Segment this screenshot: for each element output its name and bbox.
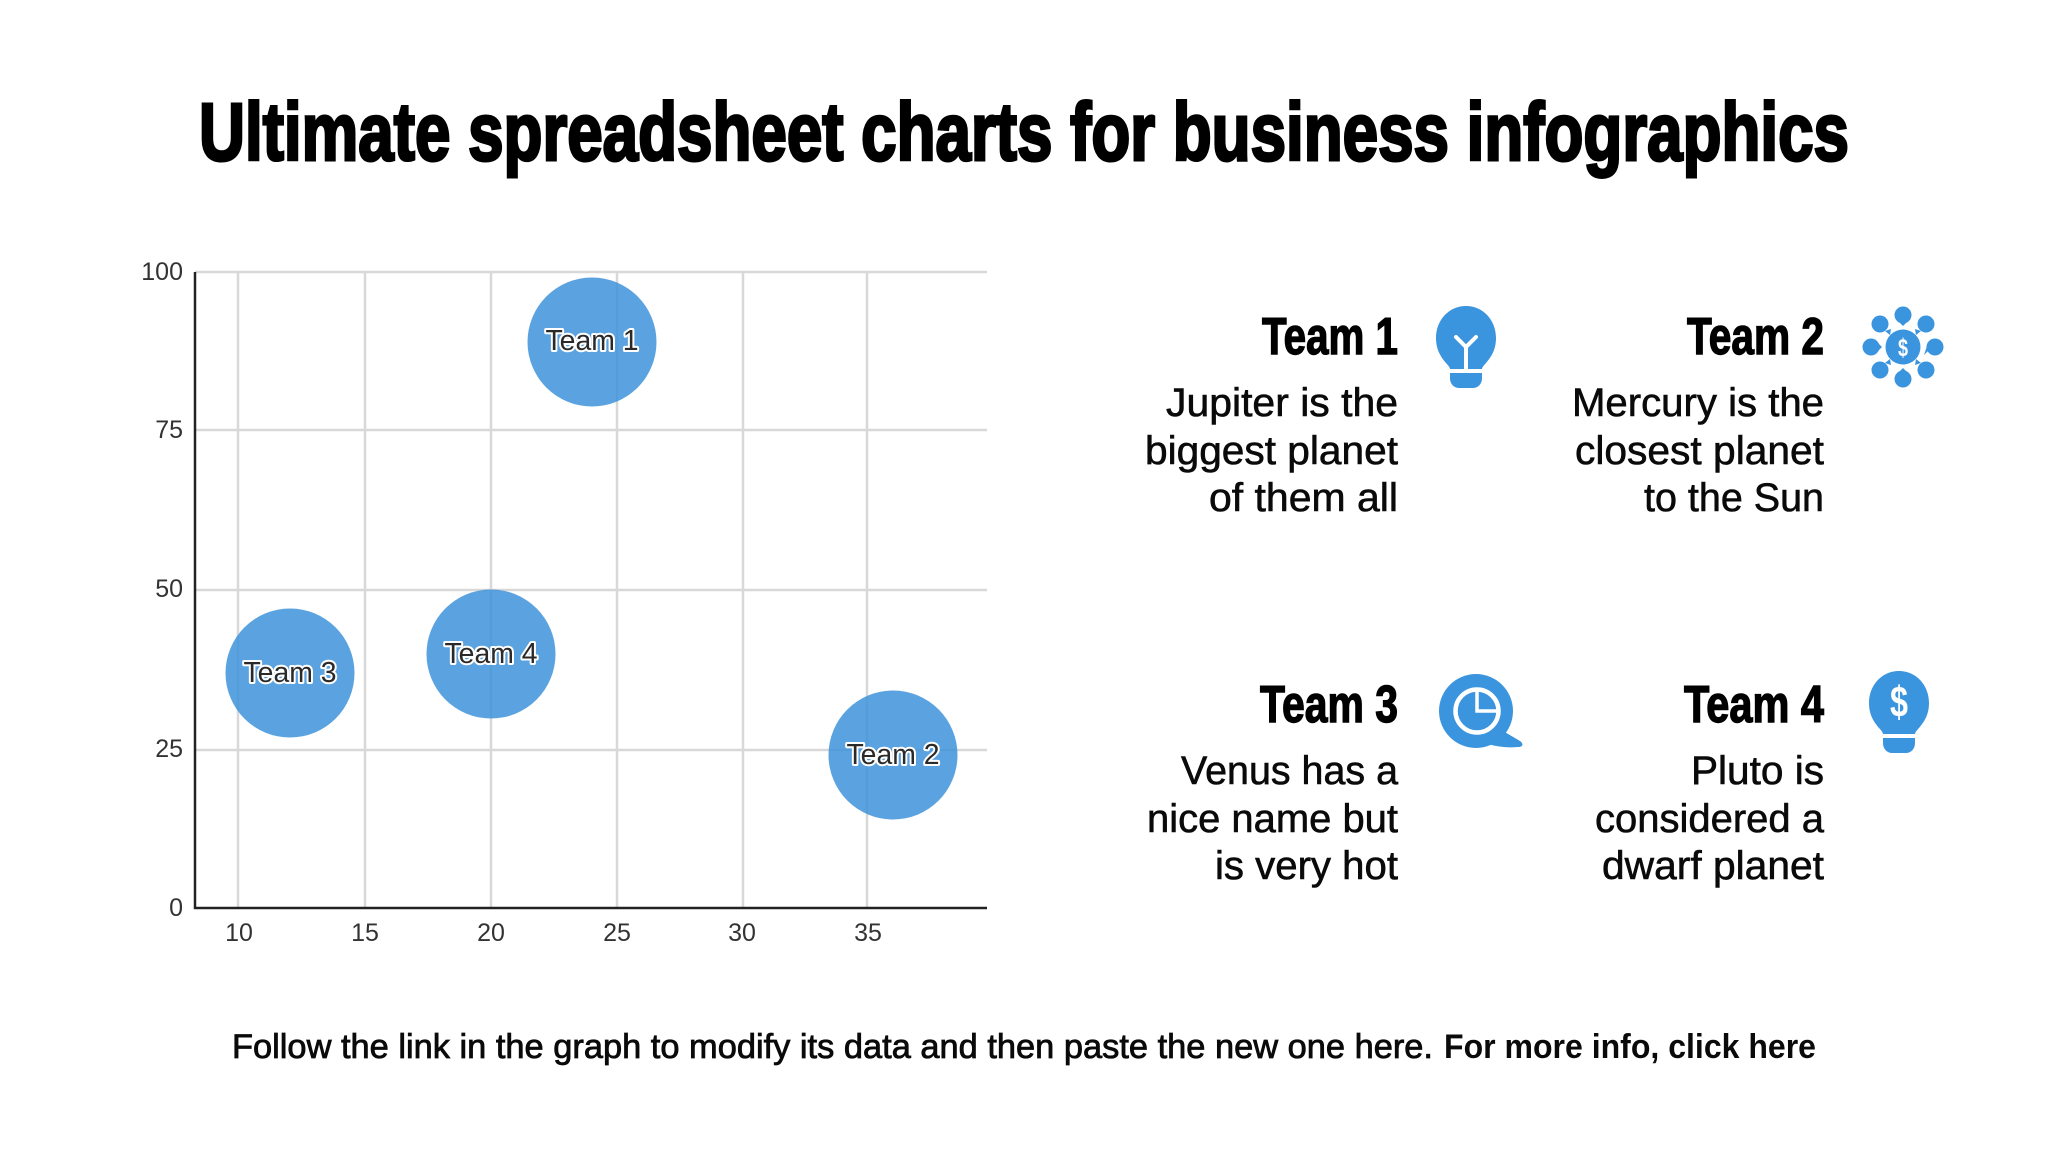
- text: Team 3 description: Venus has a: [1181, 749, 1399, 793]
- footer link: For more info, click here: [1444, 1028, 1816, 1066]
- icon: pie chart speech bubble: [1439, 674, 1522, 748]
- chart: bubble chart of teams: [141, 258, 987, 947]
- bubble: Team 4: [426, 590, 556, 718]
- bubble: Team 2: Team 2: [846, 739, 940, 771]
- text: Team 1 description: biggest planet: [1145, 429, 1398, 473]
- bubble: Team 1: [528, 278, 656, 406]
- heading: Team 3: Team 3: [1260, 676, 1398, 734]
- panel: Team 4: [1595, 671, 1929, 888]
- y axis labels: [141, 258, 183, 922]
- heading: Team 1: Team 1: [1262, 308, 1398, 366]
- x axis labels: 15: [351, 919, 379, 947]
- x axis labels: 20: [477, 919, 505, 947]
- x axis labels: 10: [225, 919, 253, 947]
- text: Team 1 description: of them all: [1209, 476, 1398, 520]
- text: Team 2 description: closest planet: [1575, 429, 1824, 473]
- text: Team 1 description: Jupiter is the: [1166, 381, 1398, 425]
- bubble: Team 3: Team 3: [244, 657, 336, 689]
- text: Team 4 description: [1595, 749, 1825, 888]
- y axis labels: 50: [155, 575, 183, 603]
- text: Team 2 description: [1572, 381, 1824, 520]
- panel: Team 3: [1147, 674, 1522, 888]
- text: Team 2 description: Mercury is the: [1572, 381, 1824, 425]
- x axis labels: 30: [728, 919, 756, 947]
- x axis labels: [225, 919, 882, 947]
- bubble: Team 2: [828, 690, 958, 820]
- bubble: Team 3: [226, 608, 354, 738]
- text: Team 4 description: Pluto is: [1691, 749, 1824, 793]
- text: Team 3 description: nice name but: [1147, 797, 1398, 841]
- icon: dollar light bulb: $: [1890, 678, 1908, 727]
- icon: dollar network: $: [1898, 334, 1908, 362]
- y axis labels: 25: [155, 735, 183, 763]
- bubble: Team 4: Team 4: [444, 638, 538, 670]
- icon: dollar light bulb: [1869, 671, 1929, 753]
- y axis labels: 0: [169, 894, 183, 922]
- panel: Team 2: [1572, 306, 1944, 520]
- icon: light bulb: [1436, 306, 1496, 388]
- text: Team 2 description: to the Sun: [1644, 476, 1824, 520]
- text: Team 4 description: dwarf planet: [1602, 844, 1824, 888]
- footer note: Follow the link in the graph to modify its data and then paste the new one here.: [232, 1028, 1433, 1066]
- heading: Team 4: Team 4: [1684, 676, 1824, 734]
- text: Team 4 description: considered a: [1595, 797, 1825, 841]
- x axis labels: 25: [603, 919, 631, 947]
- panel: Team 1: [1145, 306, 1496, 520]
- y axis labels: 75: [155, 416, 183, 444]
- heading: Team 2: Team 2: [1687, 308, 1824, 366]
- y axis labels: 100: [141, 258, 183, 286]
- bubble: Team 1: Team 1: [546, 325, 638, 357]
- text: Team 1 description: [1145, 381, 1398, 520]
- icon: dollar network: [1862, 306, 1944, 388]
- x axis labels: 35: [854, 919, 882, 947]
- text: Team 3 description: [1147, 749, 1399, 888]
- text: Team 3 description: is very hot: [1215, 844, 1398, 888]
